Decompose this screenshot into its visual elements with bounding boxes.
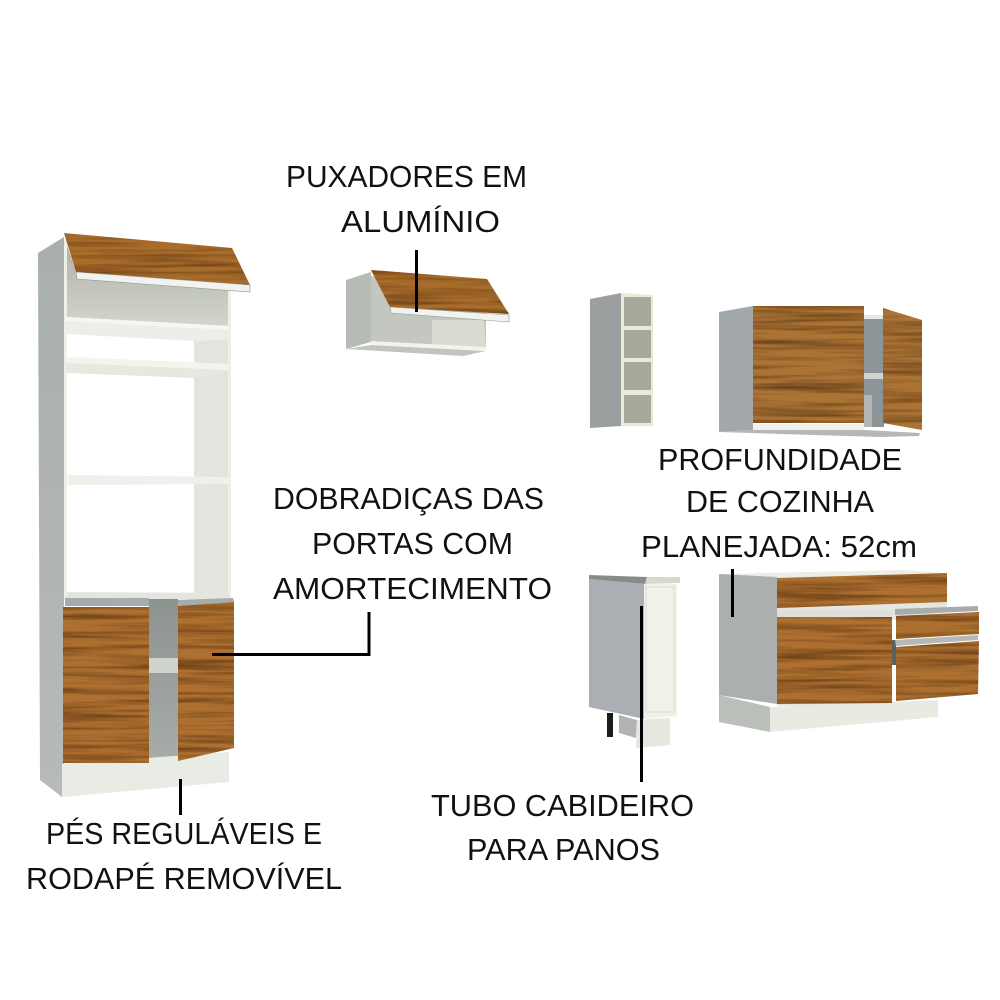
top edge (719, 570, 947, 578)
niches (624, 297, 651, 423)
label: dobradiças (273, 481, 552, 606)
shelf one (66, 317, 228, 341)
interior (646, 587, 674, 712)
lower interior shelf (149, 658, 178, 673)
front frame (621, 293, 653, 426)
leg (607, 713, 613, 737)
shelf (864, 373, 884, 379)
left door (63, 607, 149, 763)
shelf two (66, 357, 228, 378)
open niche cabinet (590, 293, 653, 428)
callout line: profundidade (731, 569, 734, 617)
door (777, 617, 892, 704)
handle (753, 424, 864, 430)
right back panel (194, 330, 228, 595)
label: dobradiças: DOBRADIÇAS DAS (273, 481, 544, 516)
label: profundidade: DE COZINHA (686, 484, 874, 519)
right door (883, 308, 922, 430)
underside (346, 345, 486, 356)
label: profundidade: PROFUNDIDADE (658, 442, 902, 477)
callout line: dobradiças (212, 612, 369, 654)
left door (753, 306, 864, 423)
bottom lip (371, 341, 486, 351)
wall flap cabinet (346, 270, 509, 356)
drawer handle two (895, 635, 978, 646)
counter shelf (65, 592, 233, 600)
lower interior light (864, 395, 872, 427)
drawer two (896, 641, 979, 701)
side panel (719, 306, 753, 432)
interior (371, 276, 486, 348)
label: dobradiças: AMORTECIMENTO (273, 571, 552, 606)
underside (719, 430, 920, 437)
tall oven cabinet (38, 233, 250, 797)
label: tubo cabideiro (431, 788, 694, 867)
side panel (590, 293, 621, 428)
label: profundidade (641, 442, 917, 564)
callout line: puxadores (415, 250, 418, 312)
drawer handle one (895, 606, 978, 615)
side panel (346, 272, 371, 349)
flap aluminium handle (76, 272, 250, 292)
two door wall cabinet (719, 306, 922, 437)
door handle (777, 609, 892, 617)
body gap (777, 600, 947, 706)
label: pés reguláveis: RODAPÉ REMOVÍVEL (26, 861, 342, 896)
counter edge (65, 598, 149, 606)
right door (178, 602, 234, 761)
plinth front (636, 718, 670, 748)
side panel (589, 579, 644, 719)
narrow base cabinet (589, 575, 680, 748)
dark gap (892, 640, 896, 665)
side panel (719, 574, 777, 704)
top flap wood (64, 233, 250, 285)
label: dobradiças: PORTAS COM (312, 526, 513, 561)
label: pés reguláveis (26, 816, 342, 896)
drawer one (896, 612, 979, 639)
handle (390, 307, 509, 322)
plinth front (770, 700, 938, 732)
callout line: pés (179, 779, 182, 815)
label: puxadores em alumínio: PUXADORES EM (286, 159, 527, 194)
lower interior (149, 599, 178, 759)
flap wood (371, 270, 509, 314)
label: puxadores em alumínio (286, 159, 527, 239)
wide base cabinet (719, 570, 979, 732)
interior (864, 316, 884, 427)
front frame (644, 584, 677, 719)
upper back recess (67, 245, 228, 326)
side panel (38, 237, 64, 797)
plinth (62, 752, 229, 797)
label: profundidade: PLANEJADA: 52cm (641, 529, 917, 564)
top strip (864, 315, 884, 319)
worktop light (645, 577, 680, 584)
plinth side (619, 715, 637, 738)
top drawer (777, 573, 947, 608)
cabinet frame (64, 240, 231, 600)
callout line: tubo (640, 606, 643, 782)
worktop grey (589, 575, 647, 584)
label: puxadores em alumínio: ALUMÍNIO (341, 204, 500, 239)
label: tubo cabideiro: PARA PANOS (467, 832, 660, 867)
shelf three (68, 475, 228, 485)
label: pés reguláveis: PÉS REGULÁVEIS E (46, 816, 322, 851)
label: tubo cabideiro: TUBO CABIDEIRO (431, 788, 694, 823)
plinth side (719, 695, 770, 732)
interior right light (432, 320, 486, 348)
